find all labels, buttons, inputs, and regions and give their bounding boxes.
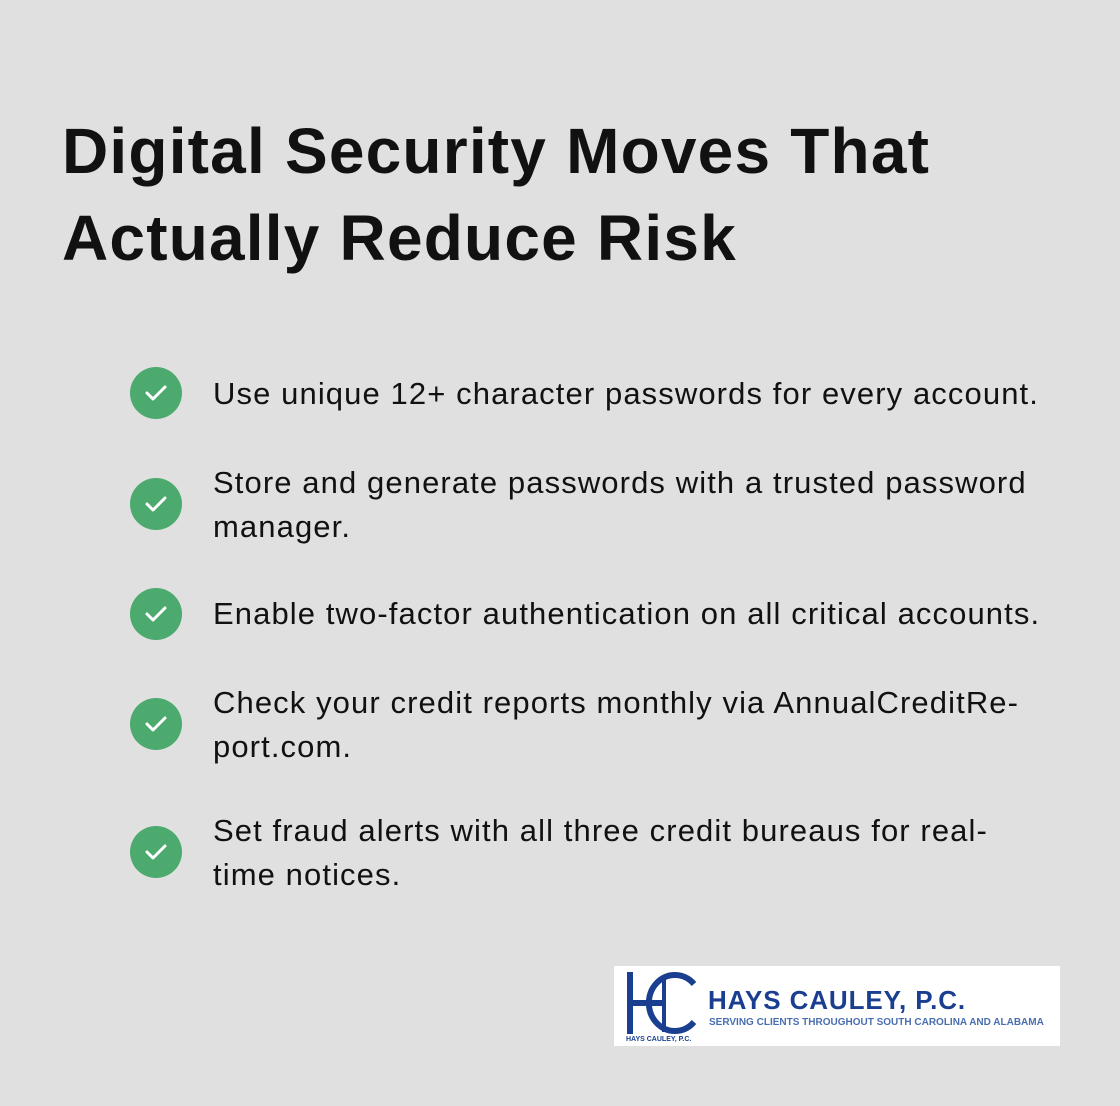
text: Use unique 12+ character passwords for every account. <box>213 376 1039 411</box>
text: Set fraud alerts with all three credit bureaus for real- <box>213 813 988 848</box>
text: Check your credit reports monthly via AnnualCreditRe- <box>213 685 1019 720</box>
text: Enable two-factor authentication on all critical accounts. <box>213 596 1040 631</box>
logo <box>614 966 1060 1046</box>
item 5 <box>130 813 988 892</box>
item 2 <box>130 465 1027 544</box>
icon: check <box>130 698 182 750</box>
item 1 <box>130 367 1039 419</box>
icon: check <box>130 367 182 419</box>
logo tagline: SERVING CLIENTS THROUGHOUT SOUTH CAROLINA AND ALABAMA <box>709 1017 1044 1028</box>
title: Actually Reduce Risk <box>62 202 737 274</box>
text <box>213 685 1019 764</box>
logo small: HAYS CAULEY, P.C. <box>626 1036 691 1043</box>
text <box>213 813 988 892</box>
icon: check <box>130 588 182 640</box>
icon: check <box>130 826 182 878</box>
logo mark <box>627 972 696 1034</box>
text: time notices. <box>213 857 401 892</box>
title: Digital Security Moves That <box>62 115 930 187</box>
item 3 <box>130 588 1040 640</box>
text <box>213 465 1027 544</box>
item 4 <box>130 685 1019 764</box>
title <box>62 115 930 274</box>
text: Store and generate passwords with a trusted password <box>213 465 1027 500</box>
icon: check <box>130 478 182 530</box>
text: port.com. <box>213 729 352 764</box>
text: manager. <box>213 509 351 544</box>
logo name: HAYS CAULEY, P.C. <box>708 985 966 1015</box>
